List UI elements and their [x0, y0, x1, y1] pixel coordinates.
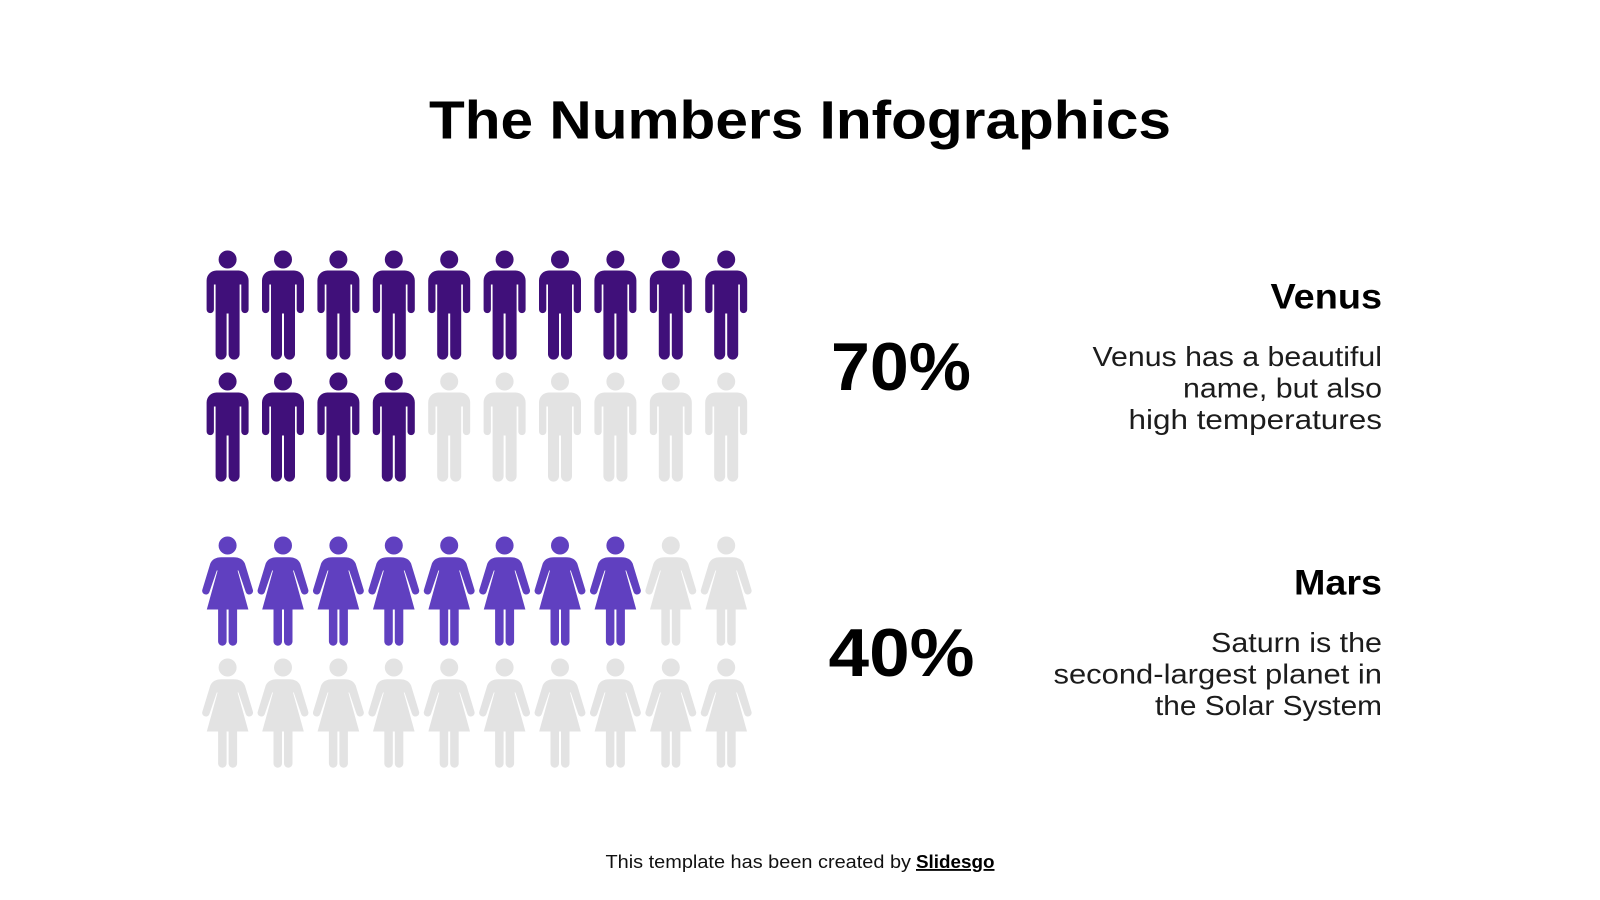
men row 2: four dark figures — [207, 372, 415, 482]
description: Venus: high temperatures — [1128, 404, 1382, 435]
description: Mars — [1054, 627, 1382, 721]
women row 2: ten grey figures — [202, 658, 752, 768]
footer credit: Slidesgo — [916, 851, 994, 872]
panel: Venus pictogram of men, 70% — [207, 250, 747, 482]
women row 1: two grey figures — [645, 536, 752, 646]
heading: Mars: Mars — [1294, 564, 1382, 602]
description: Venus: Venus has a beautiful — [1092, 341, 1382, 372]
title: The Numbers Infographics — [429, 90, 1171, 150]
description: Mars: the Solar System — [1155, 690, 1382, 721]
description: Venus: name, but also — [1183, 372, 1382, 404]
stat: 40%: 40% — [828, 615, 974, 691]
description: Mars: second-largest planet in — [1054, 658, 1382, 690]
stat: 70%: 70% — [831, 329, 971, 405]
text block: Mars — [1054, 564, 1382, 721]
men row 2: six grey figures — [428, 372, 747, 482]
footer credit: This template has been created by — [606, 851, 912, 872]
description: Venus — [1092, 341, 1382, 435]
panel: Mars pictogram of women, 40% — [202, 536, 752, 768]
description: Mars: Saturn is the — [1211, 627, 1382, 658]
women row 1: eight violet figures — [202, 536, 641, 646]
men row 1: ten dark figures — [207, 250, 747, 360]
text block: Venus — [1092, 278, 1382, 435]
heading: Venus: Venus — [1270, 278, 1382, 316]
